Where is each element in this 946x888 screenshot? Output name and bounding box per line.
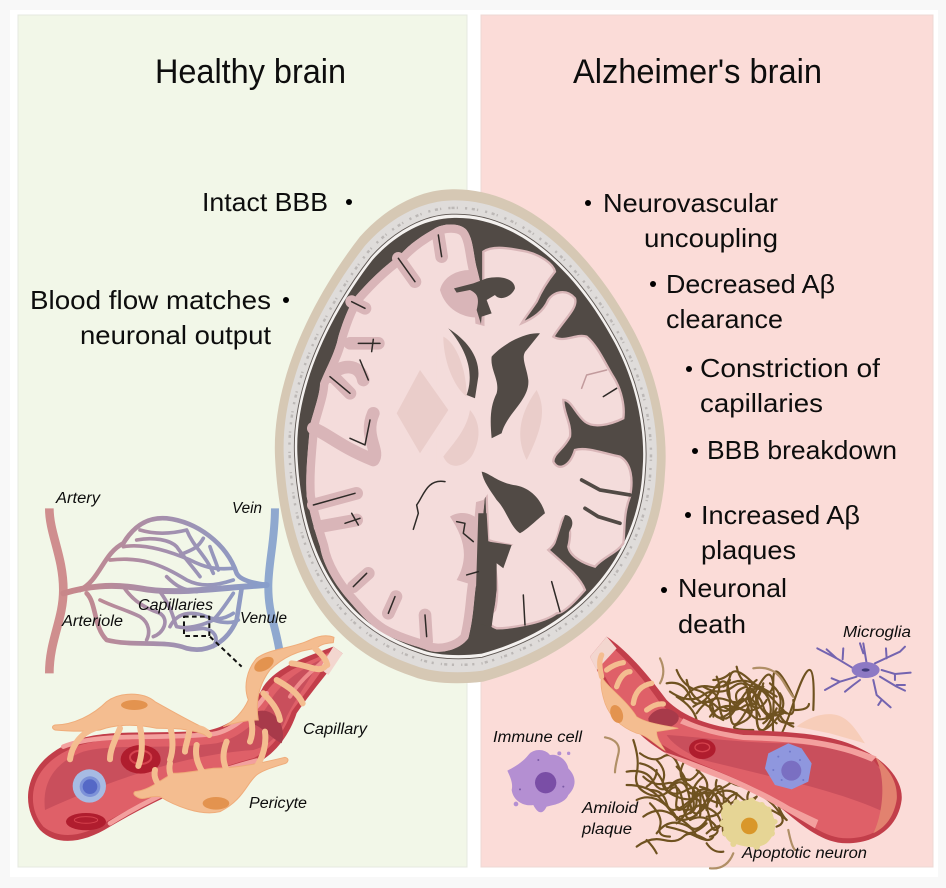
label: Artery: Artery — [55, 490, 101, 507]
thin sulcal lines — [313, 235, 617, 637]
red blood cell — [689, 739, 716, 759]
healthy feature list — [30, 187, 352, 350]
brain cross-section — [275, 189, 666, 683]
heading: Alzheimer's brain: Alzheimer's brain — [573, 53, 822, 91]
apoptotic neuron — [720, 798, 778, 850]
dashed inset box — [184, 617, 242, 667]
blue immune cell — [73, 769, 106, 803]
ventricles and sulci — [448, 277, 572, 627]
amyloid plaque tangle — [605, 658, 814, 868]
text: Increased A-beta plaques: Increased Aβ — [701, 500, 860, 530]
panel: healthy brain background — [18, 15, 467, 867]
healthy capillary with pericytes — [28, 636, 343, 841]
artery — [49, 508, 63, 673]
text: Neuronal death: Neuronal — [678, 573, 787, 603]
vein — [268, 508, 279, 650]
lower pericyte — [134, 732, 288, 813]
icon: microglia — [817, 643, 911, 707]
label: Amiloid plaque: plaque — [581, 821, 632, 838]
panel: Alzheimer's brain background — [481, 15, 933, 867]
label: Pericyte: Pericyte — [249, 795, 307, 812]
heading: Healthy brain: Healthy brain — [155, 53, 346, 91]
faded background pericyte — [797, 714, 865, 743]
text: Neurovascular uncoupling — [585, 188, 778, 253]
thick right sulci — [582, 480, 630, 523]
text: Blood flow matches neuronal output — [30, 285, 289, 350]
text: BBB breakdown: BBB breakdown — [707, 435, 897, 465]
label: Capillary: Capillary — [303, 721, 368, 738]
skull bone speckle — [289, 208, 651, 665]
label: Immune cell: Immune cell — [493, 729, 583, 746]
skull bone layer — [284, 200, 657, 672]
capillary network — [63, 518, 267, 650]
central white matter — [437, 313, 547, 513]
text: Increased A-beta plaques: plaques — [701, 535, 796, 565]
icon: immune cell — [507, 750, 575, 812]
label: Arteriole: Arteriole — [61, 613, 123, 630]
label: Apoptotic neuron: Apoptotic neuron — [741, 845, 867, 862]
text: Decreased A-beta clearance — [650, 269, 835, 334]
text: Neuronal death: death — [678, 609, 746, 639]
capillary vessel — [28, 647, 343, 841]
red blood cells — [66, 745, 161, 830]
text: Constriction of capillaries — [686, 353, 881, 418]
skull outer layer — [275, 189, 666, 683]
label: Capillaries: Capillaries — [138, 597, 213, 614]
Alzheimer's feature list — [585, 188, 897, 639]
left hemisphere white matter and cortex — [306, 224, 490, 652]
label: Amiloid plaque: Amiloid — [581, 800, 640, 817]
damaged capillary vessel — [590, 637, 902, 843]
pink atrophy zones — [440, 270, 483, 587]
text: Increased A-beta plaques — [685, 500, 860, 565]
text: Blood flow matches neuronal output: Blood flow matches — [30, 285, 271, 315]
pericyte on damaged vessel — [600, 655, 678, 751]
label: Microglia: Microglia — [843, 624, 911, 641]
text: Neuronal death — [661, 573, 787, 639]
label: Amiloid plaque — [581, 800, 640, 838]
text: Constriction of capillaries: capillaries — [700, 388, 823, 418]
Alzheimer's vessel scene — [507, 637, 911, 868]
upper pericyte — [52, 636, 334, 766]
text: Decreased A-beta clearance: clearance — [666, 304, 783, 334]
label: Vein: Vein — [232, 500, 262, 517]
text: Blood flow matches neuronal output: neuronal output — [80, 320, 272, 350]
label: Venule: Venule — [240, 610, 287, 627]
text: Decreased A-beta clearance: Decreased Aβ — [666, 269, 835, 299]
inner skull line — [294, 214, 646, 659]
text: Intact BBB: Intact BBB — [202, 187, 328, 217]
cortical folds — [313, 235, 442, 642]
blue immune cell in lumen — [765, 743, 812, 789]
text: Neurovascular uncoupling: Neurovascular — [603, 188, 778, 218]
basal ganglia — [397, 337, 542, 466]
text: Constriction of capillaries: Constriction of — [700, 353, 881, 383]
vascular tree diagram — [49, 508, 279, 673]
text: Neurovascular uncoupling: uncoupling — [644, 223, 778, 253]
subarachnoid dark space — [297, 218, 643, 655]
atrophied right hemisphere — [483, 248, 631, 628]
